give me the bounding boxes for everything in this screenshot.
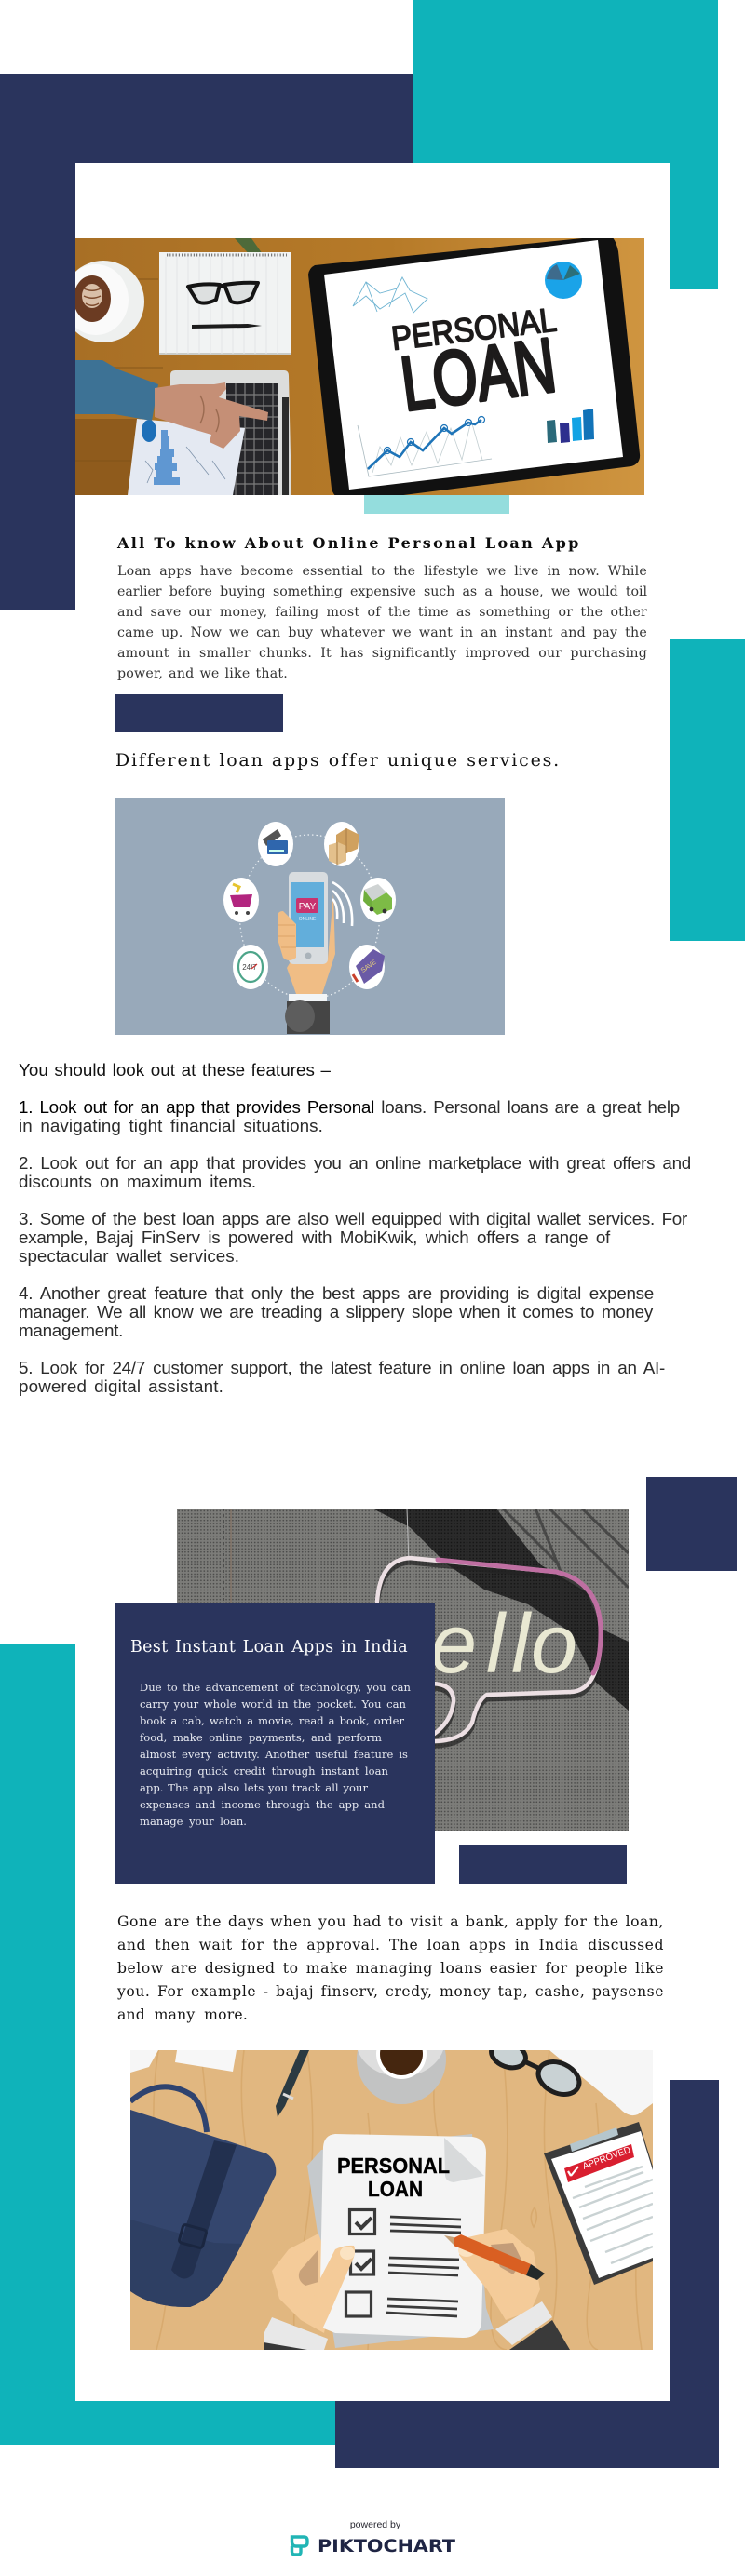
feature list: example, Bajaj FinServ is powered with MobiKwik, which offers a range of: [19, 1228, 610, 1247]
icon: bank cards: [258, 822, 293, 866]
feature list: 5. Look for 24/7 customer support, the latest feature in online loan apps in an AI-: [19, 1358, 665, 1377]
intro paragraph: [117, 564, 647, 681]
teal block top right: [413, 0, 718, 289]
loan checklist document: PERSONAL: [337, 2153, 450, 2178]
paragraph: gone are the days: below are designed to make managing loans easier for people like: [117, 1960, 664, 1977]
feature list: 1. Look out for an app that provides Personal loans. Personal loans are a great help: [19, 1097, 680, 1117]
card body text: app. The app also lets you track all your: [140, 1781, 368, 1794]
feature list: spectacular wallet services.: [19, 1246, 239, 1266]
clipboard with approved stamp: [544, 2122, 653, 2285]
feature list: manager. We all know we are treading a slippery slope when it comes to money: [19, 1302, 653, 1322]
sleeve and pointing hand: [75, 360, 268, 449]
teal block bottom left: [0, 1644, 335, 2445]
heading: all to know: All To know About Online Personal Loan App: [117, 534, 581, 552]
navy block bottom right: [335, 2080, 719, 2468]
tablet with screen: [308, 235, 640, 503]
navy block top left: [0, 74, 413, 610]
piktochart logo icon: [291, 2535, 309, 2556]
checklist boxes: [346, 2209, 461, 2316]
intro paragraph: Loan apps have become essential to the lifestyle we live in now. While: [117, 564, 647, 579]
powered by footer: [291, 2519, 455, 2556]
loan checklist document: LOAN: [368, 2177, 423, 2201]
intro paragraph: and save our money, failing most of the time as something or the other: [117, 605, 647, 620]
bar chart: [547, 409, 594, 443]
feature list: in navigating tight financial situations.: [19, 1116, 323, 1135]
coffee cup: [357, 2015, 446, 2104]
card body text: carry your whole world in the pocket. You can: [140, 1697, 406, 1711]
paragraph: gone are the days: you. For example - bajaj finserv, credy, money tap, cashe, paysense: [117, 1983, 664, 2000]
paper with blue charts: [128, 419, 245, 495]
navy accent bar two: [459, 1845, 627, 1884]
neon speech bubble: [377, 1558, 601, 1746]
white content panel: [75, 163, 670, 2401]
intro paragraph: power, and we like that.: [117, 666, 288, 681]
line chart: [358, 417, 492, 476]
clipboard with approved stamp: APPROVED: [581, 2145, 632, 2172]
feature list: discounts on maximum items.: [19, 1172, 256, 1191]
paragraph: gone are the days: and many more.: [117, 2006, 248, 2023]
network graphic: [353, 277, 427, 313]
icon: discount tag: SAVE: [360, 959, 378, 974]
intro paragraph: came up. Now we can buy whatever we want in an instant and pay the: [117, 625, 647, 640]
navy info card: [115, 1603, 435, 1884]
neon hello lettering: hello: [376, 1598, 577, 1691]
hand holding phone: [278, 872, 352, 994]
hands and pencil: [264, 2229, 570, 2350]
PERSONAL LOAN lettering: PERSONAL: [389, 300, 559, 357]
coffee cup and saucer: [62, 261, 144, 342]
powered by text: powered by: [350, 2519, 400, 2530]
subheading: different loan apps: Different loan apps offer unique services.: [115, 750, 561, 771]
icon: shopping cart: [224, 878, 259, 922]
left hand behind page: [272, 2234, 335, 2333]
PERSONAL LOAN lettering: [389, 300, 561, 427]
illustration: pay online hand with phone: [115, 798, 505, 1035]
glasses: [488, 2037, 585, 2100]
icon: 24/7 clock: [233, 945, 268, 989]
icon: discount tag: [349, 945, 385, 989]
navy square top right of section two: [646, 1477, 737, 1571]
paragraph: gone are the days: [117, 1913, 664, 2023]
shirt cuff and sleeve: [285, 994, 330, 1034]
feature list: You should look out at these features –: [19, 1060, 331, 1080]
feature list: powered digital assistant.: [19, 1376, 224, 1396]
teal strip right: [670, 639, 745, 941]
light teal accent under photo: [364, 495, 509, 514]
feature list: 3. Some of the best loan apps are also well equipped with digital wallet services. For: [19, 1209, 687, 1228]
intro paragraph: earlier before buying something expensive such as a house, we would toil: [117, 584, 647, 599]
feature list: [19, 1060, 691, 1396]
photo: personal loan tablet on desk: [75, 238, 644, 495]
hand holding phone: ONLINE: [299, 917, 317, 922]
loose papers top left: [130, 2050, 237, 2073]
icon: 24/7 clock: 24/7: [242, 963, 257, 972]
card body text: food, make online payments, and perform: [140, 1731, 382, 1744]
laptop: [170, 370, 291, 495]
icon: delivery truck: [360, 878, 396, 922]
illustration: personal loan checklist on wooden desk: [130, 2050, 653, 2350]
paragraph: gone are the days: and then wait for the approval. The loan apps in India discussed: [117, 1937, 664, 1953]
card body text: acquiring quick credit through instant loan: [140, 1764, 388, 1778]
feature list: 2. Look out for an app that provides you an online marketplace with great offers and: [19, 1153, 691, 1173]
card title: Best Instant Loan Apps in India: [130, 1638, 408, 1657]
card body text: expenses and income through the app and: [140, 1798, 385, 1811]
loan checklist document: [272, 2134, 494, 2348]
hand holding phone: PAY: [299, 902, 317, 912]
pie chart: [545, 262, 582, 299]
card body text: almost every activity. Another useful feature is: [140, 1748, 408, 1761]
card body text: manage your loan.: [140, 1815, 247, 1828]
card body text: [140, 1681, 411, 1828]
card body text: Due to the advancement of technology, you can: [140, 1681, 411, 1694]
notebook with glasses and pen: [159, 252, 291, 355]
intro paragraph: amount in smaller chunks. It has significantly improved our purchasing: [117, 646, 647, 661]
navy accent bar: [115, 694, 283, 732]
white sheet top right: [549, 2050, 653, 2115]
PERSONAL LOAN lettering: LOAN: [396, 323, 561, 427]
photo: neon hello sign: [177, 1509, 629, 1831]
pen: [276, 2050, 309, 2117]
paragraph: gone are the days: Gone are the days when you had to visit a bank, apply for the loan,: [117, 1913, 664, 1930]
feature list: management.: [19, 1321, 123, 1340]
icon: parcels: [324, 822, 359, 866]
feature list: 4. Another great feature that only the best apps are providing is digital expense: [19, 1283, 654, 1303]
card body text: book a cab, watch a movie, read a book, order: [140, 1714, 404, 1727]
navy briefcase: [130, 2086, 276, 2307]
